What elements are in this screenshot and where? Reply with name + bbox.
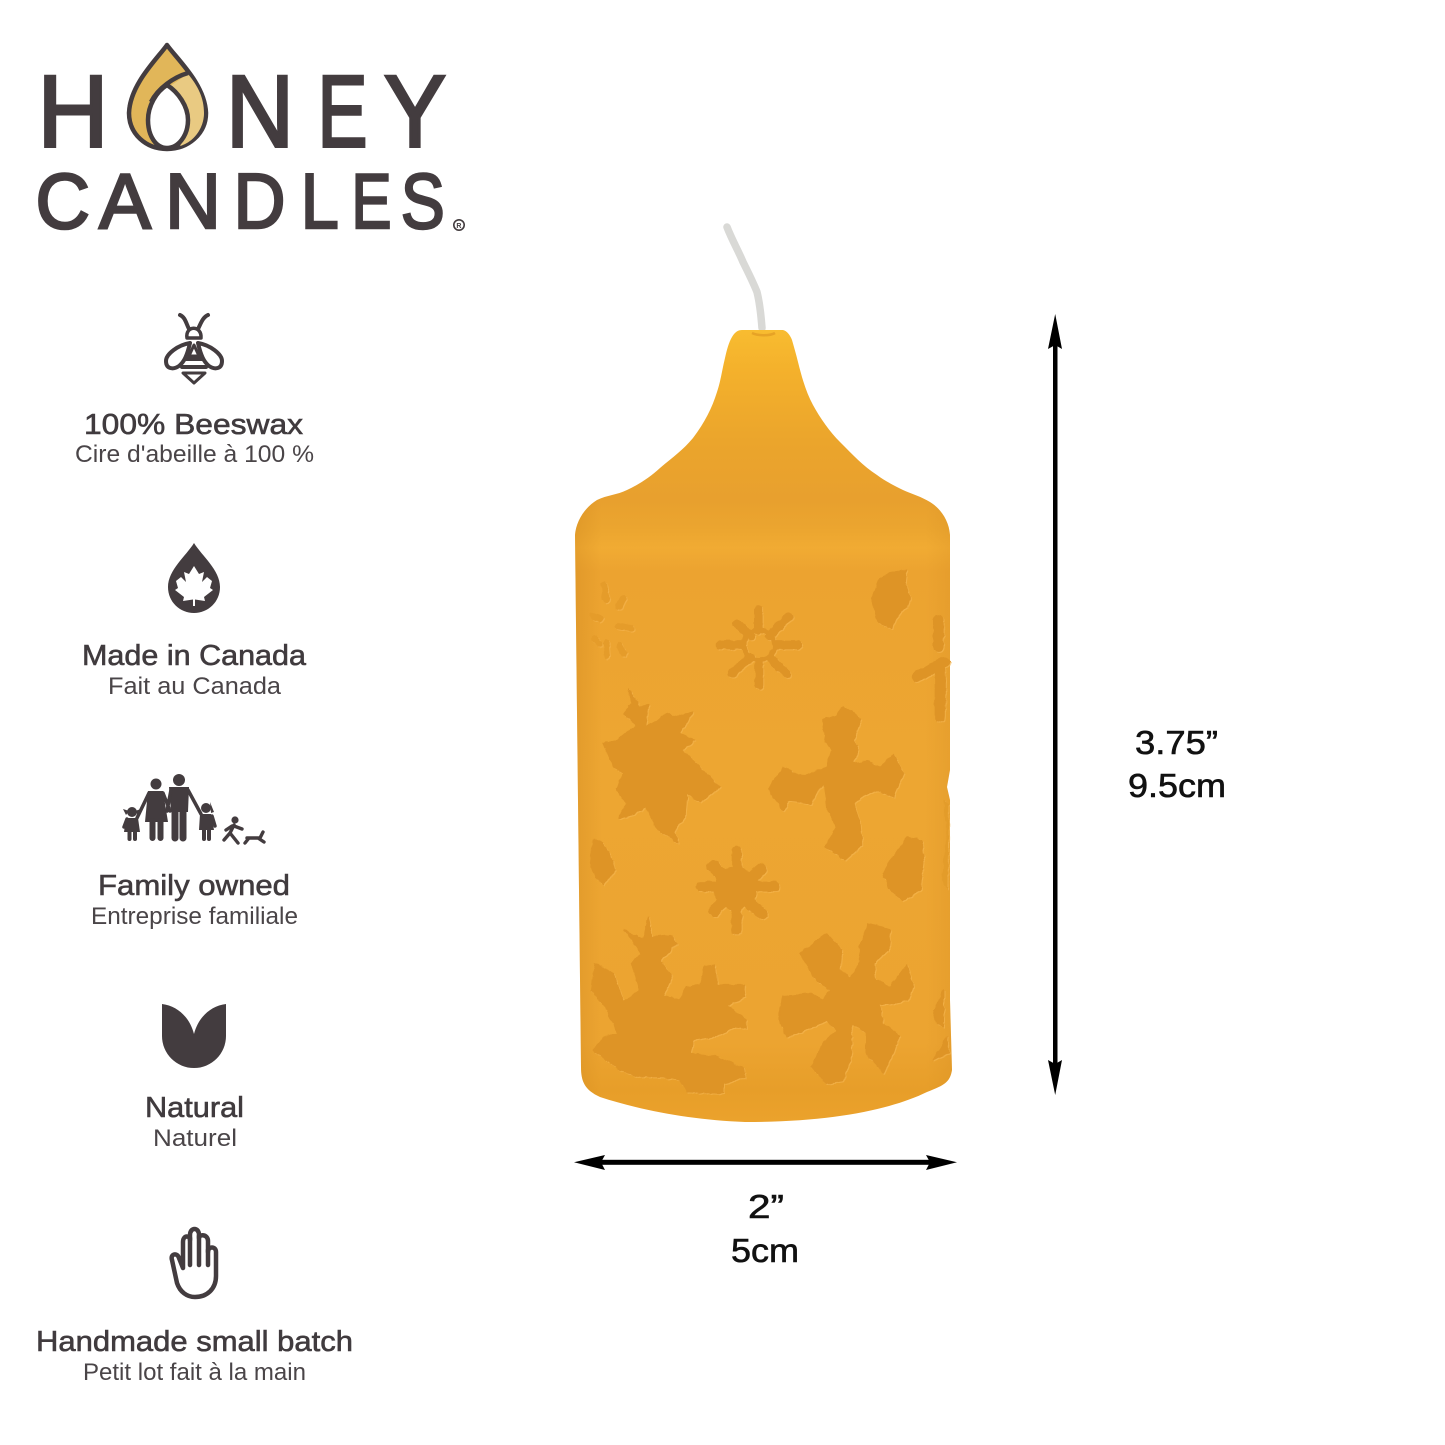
wordmark: CANDLES: L (301, 157, 339, 245)
dimension label: height: 9.5cm (1128, 767, 1226, 804)
icon: bee (166, 315, 222, 383)
eight point star flake (700, 852, 775, 930)
wordmark: CANDLES: C (36, 157, 90, 245)
left edge blob flake (590, 840, 615, 885)
faint flake (593, 585, 631, 655)
lower flakes (590, 837, 948, 1093)
feature: Family owned (91, 774, 298, 930)
heading: Natural (145, 1092, 244, 1124)
dimension label: width: 2” (748, 1188, 784, 1225)
feature: Made in Canada (82, 543, 307, 700)
dimension arrow: height (1048, 314, 1062, 1095)
candle photo (575, 227, 952, 1122)
lower right edge flakes (933, 990, 948, 1060)
upper flakes (593, 570, 945, 860)
icon: two leaves (162, 1004, 226, 1068)
feature: Natural (145, 1004, 244, 1152)
cross flake (768, 707, 903, 860)
wick (727, 227, 762, 328)
snowflake reliefs (590, 570, 949, 1093)
dimension label: width (731, 1188, 799, 1269)
dimension label: height: 3.75” (1135, 724, 1218, 761)
candle body (575, 330, 952, 1122)
subheading: Naturel (153, 1125, 237, 1152)
large bottom left flake (592, 917, 747, 1093)
ring flake (720, 610, 798, 685)
wordmark: CANDLES: N (165, 157, 221, 245)
wordmark: HONEY (38, 54, 446, 168)
right blob flake (883, 837, 923, 900)
heading: Family owned (98, 870, 290, 902)
right edge flake (917, 620, 945, 717)
feature: 100% Beeswax (75, 315, 314, 468)
registered mark: R (456, 223, 461, 230)
heading: 100% Beeswax (84, 409, 304, 441)
registered mark (454, 220, 464, 230)
leafy bottom right flake (778, 923, 913, 1083)
feature: Handmade small batch (36, 1229, 353, 1386)
subheading: Fait au Canada (108, 673, 282, 700)
wordmark: HONEY: Y (384, 54, 446, 168)
wordmark: CANDLES (36, 157, 445, 245)
icon: honey drop flame (129, 45, 206, 149)
wordmark: HONEY: H (38, 54, 108, 168)
icon: family silhouettes (123, 774, 264, 843)
right edge relief (942, 800, 949, 890)
wordmark: CANDLES: A (99, 157, 151, 245)
icon: hand (172, 1229, 216, 1297)
heading: Handmade small batch (36, 1326, 353, 1358)
subheading: Cire d'abeille à 100 % (75, 441, 314, 468)
blob flake top right (872, 570, 910, 628)
wordmark: CANDLES: S (401, 157, 445, 245)
wick hole (752, 333, 775, 335)
logo: Honey Candles (36, 45, 464, 245)
heading: Made in Canada (82, 640, 307, 672)
wordmark: CANDLES: E (352, 157, 392, 245)
candle edge shading (575, 330, 952, 1122)
dimension arrow: width (574, 1155, 957, 1170)
dimension label: width: 5cm (731, 1232, 799, 1269)
wordmark: HONEY: N (226, 54, 294, 168)
wordmark: HONEY: E (318, 54, 368, 168)
dimension label: height (1128, 724, 1226, 804)
icon: maple leaf drop (168, 543, 220, 613)
subheading: Petit lot fait à la main (83, 1359, 306, 1386)
subheading: Entreprise familiale (91, 903, 298, 930)
wordmark: CANDLES: D (234, 157, 286, 245)
large left flake (603, 690, 720, 843)
